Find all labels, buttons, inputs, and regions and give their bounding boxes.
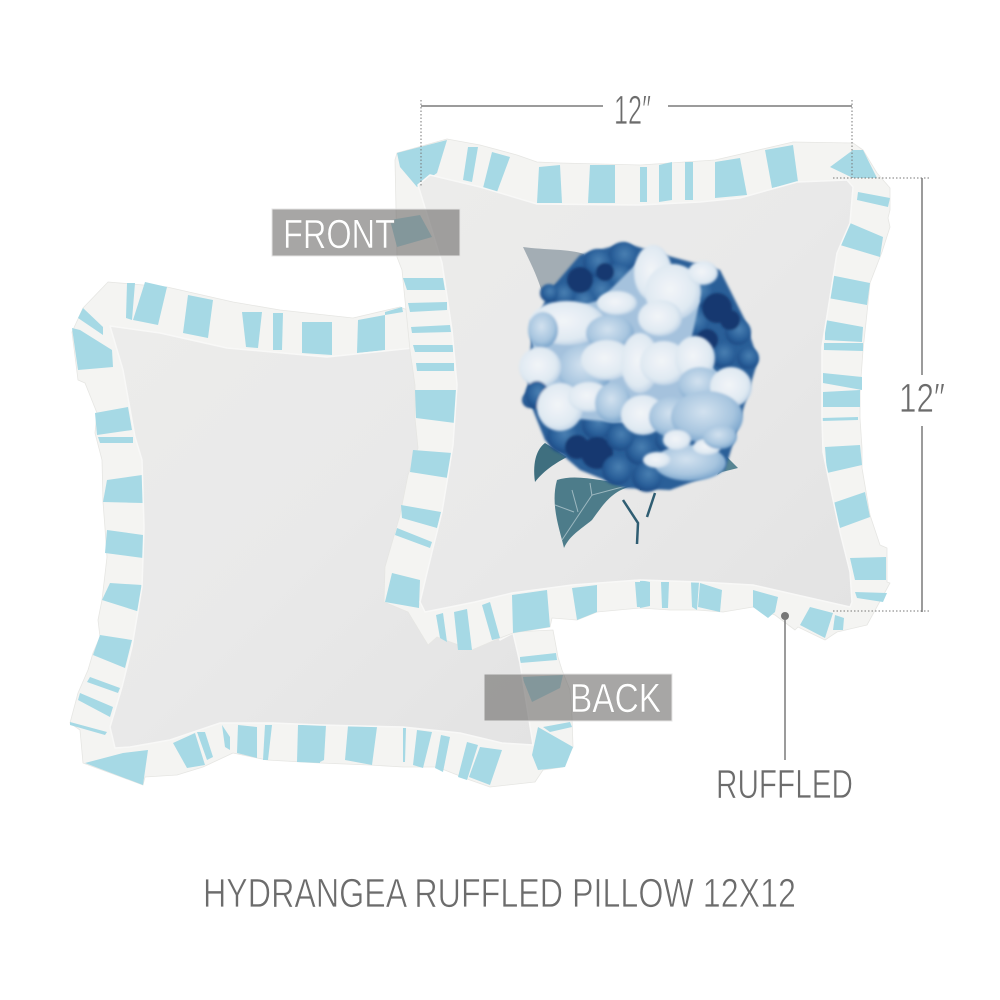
callout: ruffled: RUFFLED [716, 761, 853, 807]
back ruffle base [70, 282, 573, 787]
flower light centre [530, 260, 730, 440]
front ruffle stripes [385, 140, 890, 650]
back ruffle stripes [70, 282, 573, 785]
title: HYDRANGEA RUFFLED PILLOW 12X12 [203, 870, 796, 916]
label: BACK [484, 674, 672, 721]
back pillow [70, 282, 573, 787]
label: BACK: BACK [570, 675, 661, 721]
back pillow body [110, 326, 533, 748]
flower dark clusters [522, 242, 759, 492]
front pillow body [418, 175, 853, 612]
dimension: width 12 inches [421, 87, 852, 187]
flower base [527, 243, 758, 490]
front pillow [384, 139, 890, 650]
hydrangea illustration [519, 242, 759, 548]
leaves and stem [523, 247, 738, 548]
dimension: height 12 inches [833, 178, 945, 612]
front ruffle base [384, 139, 890, 650]
dimension: width 12 inches: 12″ [614, 87, 651, 133]
dimension: height 12 inches: 12″ [899, 375, 945, 421]
callout: ruffled [716, 612, 853, 807]
flower light petals [519, 245, 752, 481]
label: FRONT: FRONT [283, 211, 395, 257]
